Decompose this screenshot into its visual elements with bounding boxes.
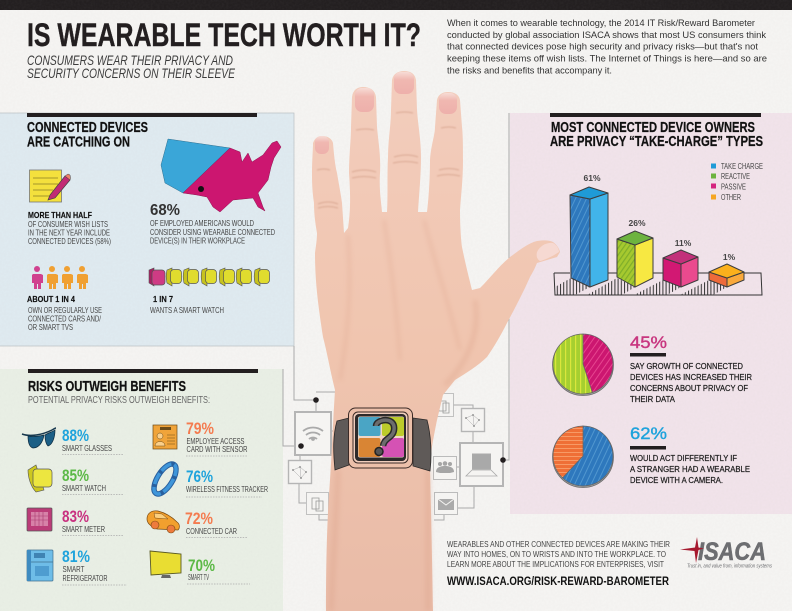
bar value labels <box>583 173 736 262</box>
icon: four people <box>32 266 88 289</box>
bar: reactive 26% <box>617 231 653 287</box>
subheading: POTENTIAL PRIVACY RISKS OUTWEIGH BENEFITS: <box>28 394 210 406</box>
item: smart tv <box>150 551 250 584</box>
icon: seven watches <box>149 268 270 286</box>
3D bar chart <box>554 173 762 295</box>
intro text <box>447 17 767 76</box>
item: smart glasses <box>22 426 124 454</box>
item: smart meter: SMART METER <box>62 524 105 534</box>
item: wireless fitness tracker: WIRELESS FITNESS TRACKER <box>186 484 268 494</box>
stat: 68 percent <box>150 202 275 246</box>
item: connected car: 72% <box>185 509 213 528</box>
knuckle creases <box>317 112 460 208</box>
stat: more than half: CONNECTED DEVICES (58%) <box>28 236 111 246</box>
device icon: documents upper right <box>436 394 454 416</box>
item: employee access card: CARD WITH SENSOR <box>186 444 248 454</box>
heading <box>550 120 763 150</box>
item: smart refrigerator: REFRIGERATOR <box>62 573 108 583</box>
subtitle: CONSUMERS WEAR THEIR PRIVACY AND <box>27 52 233 68</box>
stat: more than half <box>28 210 111 246</box>
panel: connected devices background <box>0 113 294 346</box>
chart legend <box>711 161 763 202</box>
bar value labels: 61% <box>583 173 601 183</box>
item: employee access card: 79% <box>186 419 214 438</box>
heading bar <box>550 113 761 117</box>
heading <box>27 120 148 150</box>
stat: 45 percent <box>630 333 752 404</box>
bar value labels: 26% <box>628 218 646 228</box>
footer call to action <box>447 539 670 588</box>
stat: 45 percent: SAY GROWTH OF CONNECTED <box>630 361 743 371</box>
item: smart watch: 85% <box>62 466 89 485</box>
item: smart watch: SMART WATCH <box>62 483 106 493</box>
panel: most connected device owners <box>550 113 763 488</box>
fingernails <box>315 72 559 261</box>
item: wireless fitness tracker <box>150 461 268 497</box>
stat: 1 in 7 <box>150 294 224 315</box>
panel: owners background <box>510 113 792 514</box>
stat: 68 percent: CONSIDER USING WEARABLE CONNECTED <box>150 227 275 237</box>
item: employee access card: EMPLOYEE ACCESS <box>186 436 245 446</box>
stat: 45 percent: THEIR DATA <box>630 394 675 404</box>
item: smart meter: 83% <box>62 507 89 526</box>
bar: other 1% <box>709 264 744 287</box>
item: smart glasses: 88% <box>62 426 89 445</box>
item: smart glasses: SMART GLASSES <box>62 443 112 453</box>
stat: 1 in 7: 1 IN 7 <box>153 294 173 304</box>
title: IS WEARABLE TECH WORTH IT? <box>27 17 421 53</box>
intro text: keeping these items off wish lists. The Internet of Things is here—and so are <box>447 52 767 64</box>
pie chart: 62 percent <box>552 426 614 488</box>
item: wireless fitness tracker: 76% <box>186 467 213 486</box>
icon: notepad and pencil <box>30 170 70 202</box>
chart legend: OTHER <box>721 192 741 202</box>
item: smart meter <box>27 507 124 536</box>
footer call to action: LEARN MORE ABOUT THE IMPLICATIONS FOR ENTERPRISES, VISIT <box>447 559 664 569</box>
stat: more than half: IN THE NEXT YEAR INCLUDE <box>28 228 110 238</box>
footer call to action: WAY INTO HOMES, ON TO WRISTS AND INTO THE WORKPLACE. TO <box>447 549 666 559</box>
stat: 1 in 4: CONNECTED CARS AND/ <box>28 314 101 324</box>
map: United States split <box>161 139 281 212</box>
intro text: conducted by global association ISACA shows that most US consumers think <box>447 29 766 40</box>
chart legend: TAKE CHARGE <box>721 161 763 171</box>
stat: 62 percent: WOULD ACT DIFFERENTLY IF <box>630 453 737 463</box>
stat: 1 in 4: OWN OR REGULARLY USE <box>28 305 102 315</box>
stat: 62 percent <box>630 424 750 485</box>
item: smart refrigerator <box>27 547 127 585</box>
item: smart tv: 70% <box>188 556 215 575</box>
heading: CONNECTED DEVICES <box>27 120 148 136</box>
website url: WWW.ISACA.ORG/RISK-REWARD-BAROMETER <box>447 576 670 588</box>
watch band <box>334 418 431 471</box>
intro text: When it comes to wearable technology, the 2014 IT Risk/Reward Barometer <box>447 17 755 28</box>
panel: connected devices <box>27 113 281 332</box>
device icon: people <box>434 456 456 480</box>
hand illustration <box>312 71 560 611</box>
heading bar <box>27 113 257 117</box>
watch case <box>348 408 412 468</box>
stat: 45 percent: 45% <box>630 333 667 352</box>
chart platform <box>554 273 762 295</box>
bar value labels: 11% <box>675 238 692 248</box>
footer call to action: WEARABLES AND OTHER CONNECTED DEVICES ARE MAKING THEIR <box>447 539 670 549</box>
stat: 62 percent: 62% <box>630 424 667 443</box>
device icon: documents left <box>306 492 328 514</box>
heading: RISKS OUTWEIGH BENEFITS <box>28 379 186 395</box>
intro text: the risks and benefits that accompany it. <box>447 64 612 76</box>
subtitle: SECURITY CONCERNS ON THEIR SLEEVE <box>27 65 235 81</box>
item: employee access card <box>153 419 248 456</box>
stat: more than half: OF CONSUMER WISH LISTS <box>28 219 108 229</box>
stat: more than half: MORE THAN HALF <box>28 210 92 220</box>
device icon: network graph right <box>462 408 484 432</box>
ISACA logo: Trust in, and value from, information systems <box>687 564 772 570</box>
device icon: wifi <box>295 412 331 455</box>
chart legend: REACTIVE <box>721 171 750 181</box>
heading: ARE CATCHING ON <box>27 134 130 150</box>
connector dots <box>298 397 506 463</box>
item: smart tv: SMART TV <box>188 572 209 582</box>
item: smart refrigerator: SMART <box>62 564 84 574</box>
stat: 1 in 7: WANTS A SMART WATCH <box>150 305 224 315</box>
stat: 68 percent: 68% <box>150 202 180 219</box>
stat: 1 in 4: ABOUT 1 IN 4 <box>27 294 75 304</box>
panel: risks outweigh benefits <box>22 369 268 585</box>
stat: 1 in 4: OR SMART TVS <box>28 322 73 332</box>
subtitle <box>27 52 235 81</box>
smart watch on wrist <box>334 408 431 471</box>
top black band <box>0 0 792 10</box>
item: connected car <box>147 509 248 538</box>
watch screen panels <box>358 417 404 457</box>
device icon: laptop <box>460 443 503 486</box>
ISACA logo <box>680 537 772 570</box>
heading bar <box>28 369 258 373</box>
question mark <box>375 420 394 456</box>
stat: 62 percent: DEVICE WITH A CAMERA. <box>630 475 723 485</box>
panel: risks background <box>0 369 283 611</box>
item: connected car: CONNECTED CAR <box>186 526 237 536</box>
device icon: network graph left <box>288 460 312 484</box>
intro text: that connected devices pose high security and privacy risks—but that's not <box>447 40 758 52</box>
hand shading <box>331 220 476 611</box>
bar: take charge 61% <box>570 187 608 287</box>
device icon: mail <box>434 492 458 514</box>
item: smart refrigerator: 81% <box>62 547 90 566</box>
stat: 45 percent: CONCERNS ABOUT PRIVACY OF <box>630 383 748 393</box>
network connector lines <box>283 113 509 520</box>
stat: 68 percent: DEVICE(S) IN THEIR WORKPLACE <box>150 236 245 246</box>
bar value labels: 1% <box>723 252 736 262</box>
pie chart: 45 percent <box>552 334 614 396</box>
ISACA logo: ISACA <box>698 538 766 566</box>
stat: 1 in 4 <box>27 294 102 332</box>
stat: 45 percent: DEVICES HAS INCREASED THEIR <box>630 372 752 382</box>
bar: passive 11% <box>663 250 698 287</box>
stat: 62 percent: A STRANGER HAD A WEARABLE <box>630 464 750 474</box>
stat: 68 percent: OF EMPLOYED AMERICANS WOULD <box>150 218 254 228</box>
chart legend: PASSIVE <box>721 182 746 192</box>
item: smart watch <box>28 465 124 494</box>
